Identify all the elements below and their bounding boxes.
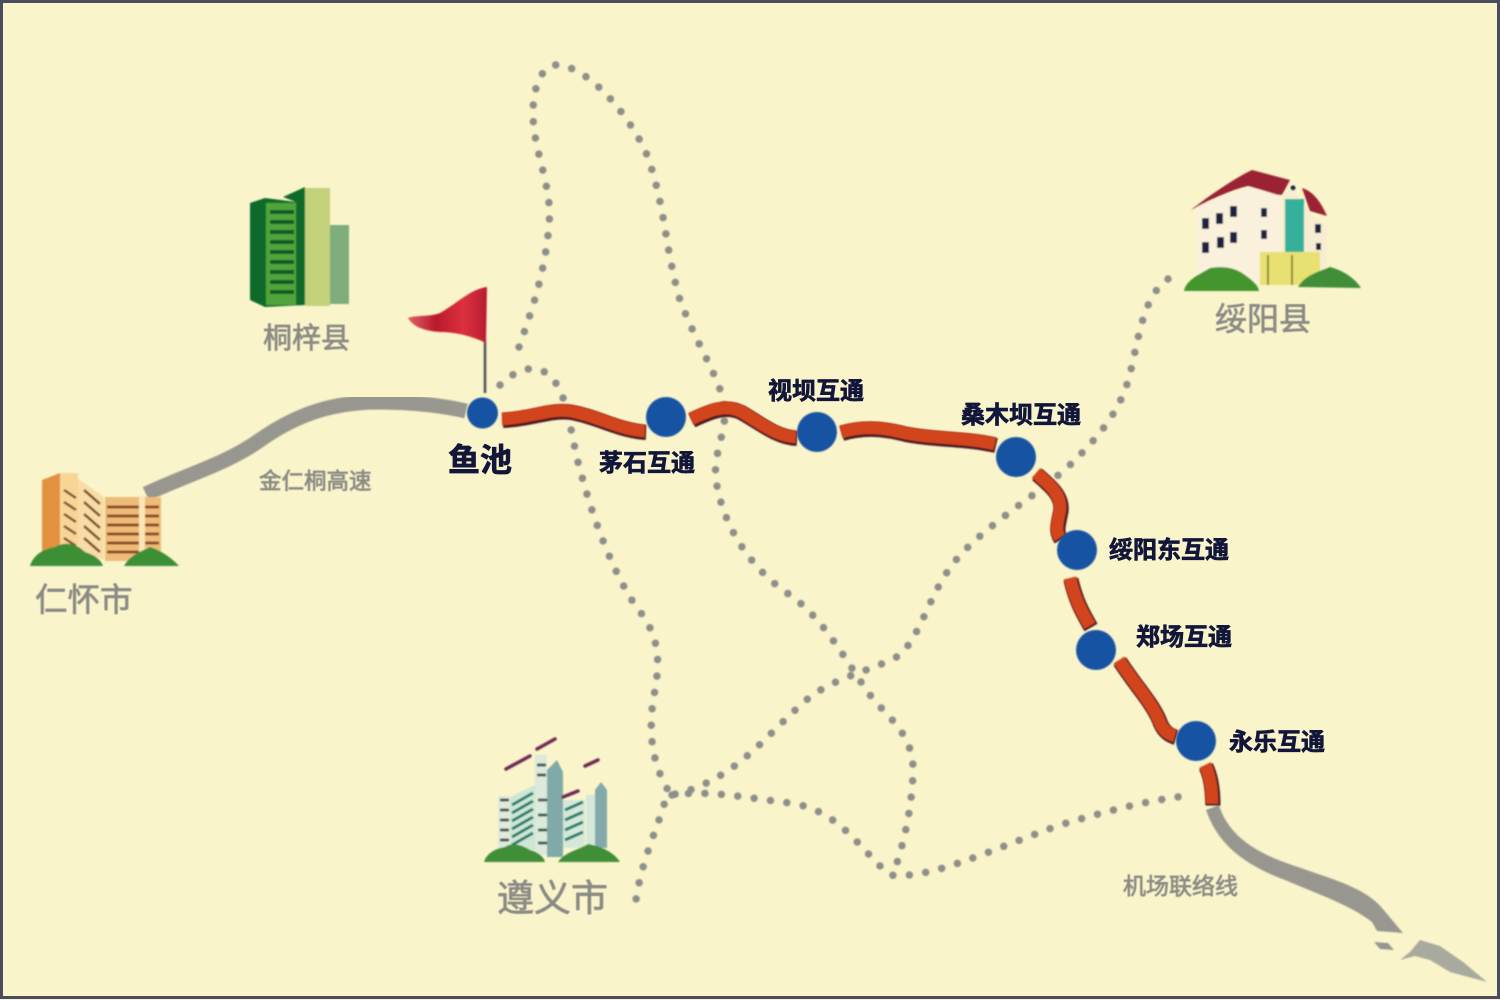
- label: 金仁桐高速: 金仁桐高速: [259, 469, 372, 494]
- label: 遵义市: 遵义市: [497, 878, 608, 919]
- label: 仁怀市: 仁怀市: [35, 582, 133, 618]
- label: 绥阳县: 绥阳县: [1215, 301, 1311, 337]
- dotted connecting roads: [500, 65, 1192, 908]
- label: 绥阳东互通: 绥阳东互通: [1109, 537, 1229, 564]
- label: 鱼池: 鱼池: [448, 442, 512, 478]
- main route shadow: [503, 409, 1213, 806]
- label: 桑木坝互通: 桑木坝互通: [961, 402, 1081, 429]
- icon: orange buildings (仁怀市): [30, 473, 179, 566]
- label: 桐梓县: 桐梓县: [263, 322, 350, 355]
- icon: teal towers (遵义市): [484, 739, 620, 862]
- label: 茅石互通: 茅石互通: [599, 450, 695, 477]
- icon: green office tower (桐梓县): [250, 187, 349, 307]
- icon: villa (绥阳县): [1184, 170, 1361, 291]
- label: 永乐互通: 永乐互通: [1229, 729, 1325, 756]
- highway: 金仁桐高速 grey road: [146, 402, 466, 494]
- main route red: [502, 408, 1212, 804]
- label: 视坝互通: 视坝互通: [768, 378, 864, 405]
- label: 郑场互通: 郑场互通: [1136, 624, 1232, 651]
- airport link grey road: [1206, 805, 1487, 982]
- icon: red flag: [408, 287, 487, 393]
- label: 机场联络线: 机场联络线: [1123, 873, 1238, 899]
- interchange nodes: [467, 397, 1216, 761]
